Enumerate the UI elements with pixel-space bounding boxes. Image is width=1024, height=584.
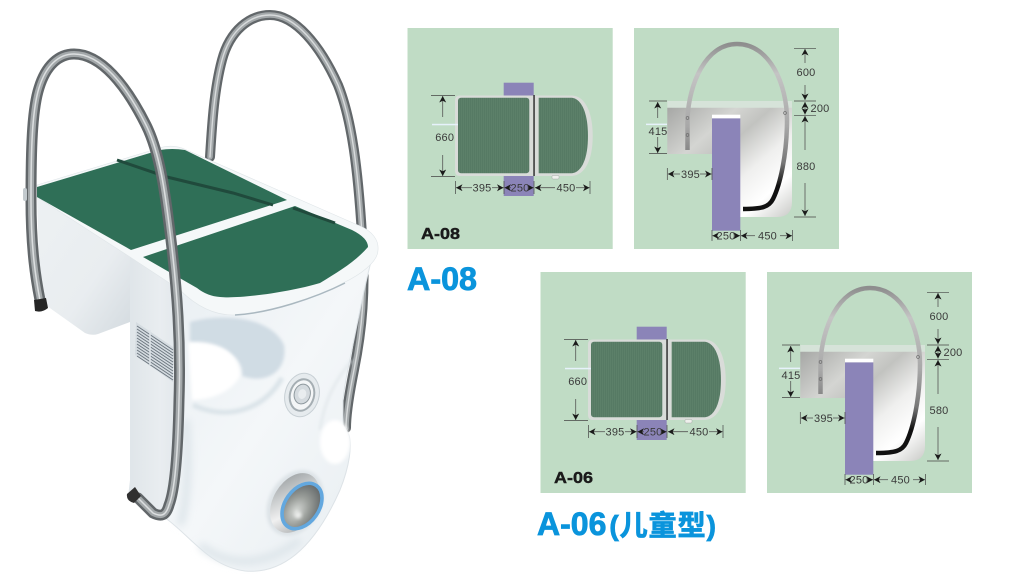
width dimensions bbox=[588, 425, 723, 439]
water level line bbox=[779, 368, 800, 369]
deck band bbox=[667, 101, 792, 108]
grille vents bbox=[135, 322, 173, 382]
width dimensions: 450 bbox=[557, 183, 575, 195]
dimension 660 bbox=[431, 96, 455, 176]
panel: A-08 top view bbox=[408, 28, 613, 249]
body silhouette bbox=[800, 352, 925, 461]
height dimensions bbox=[794, 48, 829, 217]
heading: A-08: A-08 bbox=[407, 261, 477, 297]
width dimensions: 395 bbox=[681, 169, 700, 181]
body silhouette bbox=[667, 108, 792, 217]
white ladder cap bbox=[712, 115, 740, 118]
purple ladder strip top bbox=[504, 83, 534, 96]
dimension 415 bbox=[649, 101, 667, 154]
width dimensions bbox=[456, 181, 590, 195]
width dimensions: 450 bbox=[891, 475, 910, 487]
dimension 415: 415 bbox=[782, 370, 800, 382]
deck tread right bbox=[672, 342, 721, 417]
purple ladder strip top bbox=[637, 327, 667, 340]
panel: A-06 top view bbox=[540, 272, 746, 493]
front shell bbox=[164, 258, 372, 571]
shell lower shading bbox=[180, 420, 300, 561]
heading: A-06 children's model: A-06(儿童型) bbox=[537, 506, 717, 542]
width dimensions: 395 bbox=[606, 427, 624, 439]
dimension 415 bbox=[782, 345, 800, 398]
handrail bbox=[686, 44, 787, 209]
model label: A-06 bbox=[554, 470, 593, 487]
purple ladder strip bottom bbox=[637, 420, 667, 440]
deck tread rear bbox=[37, 149, 287, 250]
underwater light bbox=[255, 460, 335, 546]
height dimensions: 200 bbox=[944, 347, 962, 359]
width dimensions: 450 bbox=[690, 427, 708, 439]
width dimensions: 395 bbox=[814, 413, 833, 425]
height dimensions: 880 bbox=[797, 161, 815, 173]
wall nozzle bbox=[280, 369, 324, 421]
height dimensions: 600 bbox=[930, 311, 948, 323]
latch bbox=[552, 176, 559, 179]
rim shadow line bbox=[235, 283, 345, 315]
deck tread front bbox=[143, 206, 368, 297]
deck tread left bbox=[458, 98, 529, 173]
deck divider bbox=[533, 95, 535, 176]
deck tread left bbox=[591, 342, 662, 417]
pump column bbox=[128, 257, 182, 518]
width dimensions: 395 bbox=[473, 183, 491, 195]
latch bbox=[685, 420, 692, 423]
water level line bbox=[432, 124, 458, 125]
width dimensions: 450 bbox=[758, 231, 777, 243]
dimension 660 bbox=[564, 340, 588, 420]
width dimensions: 250 bbox=[511, 183, 529, 195]
water level line bbox=[646, 124, 667, 125]
handrail bbox=[819, 288, 920, 453]
deck rim bbox=[37, 146, 378, 315]
height dimensions: 600 bbox=[797, 67, 815, 79]
back handrail bbox=[210, 15, 364, 428]
left tank underside bbox=[37, 197, 132, 335]
purple ladder bbox=[845, 362, 873, 475]
shell recess bbox=[188, 317, 285, 412]
panel: A-08 side view bbox=[634, 28, 839, 249]
dimension 660: 660 bbox=[435, 132, 454, 144]
height dimensions bbox=[927, 292, 962, 461]
purple ladder bbox=[712, 118, 740, 231]
deck shadow band bbox=[117, 160, 335, 223]
panel: A-06 side view bbox=[767, 272, 972, 493]
rear rubber foot bbox=[34, 298, 48, 312]
dimension 660: 660 bbox=[568, 376, 587, 388]
white ladder cap bbox=[845, 359, 873, 362]
front rubber foot bbox=[127, 487, 141, 503]
width dimensions bbox=[667, 168, 792, 243]
model label: A-08 bbox=[421, 226, 460, 243]
front handrail bbox=[31, 54, 180, 515]
height dimensions: 200 bbox=[811, 103, 829, 115]
rail bracket bbox=[23, 188, 27, 201]
water level line bbox=[565, 368, 591, 369]
shell crease bbox=[320, 360, 352, 464]
width dimensions: 250 bbox=[644, 427, 662, 439]
deck tread right bbox=[539, 98, 588, 173]
purple ladder strip bottom bbox=[504, 176, 534, 196]
deck band bbox=[800, 345, 925, 352]
width dimensions: 250 bbox=[717, 231, 735, 243]
height dimensions: 580 bbox=[930, 405, 948, 417]
width dimensions bbox=[800, 412, 926, 487]
deck outline bbox=[455, 96, 593, 176]
deck outline bbox=[588, 340, 726, 420]
width dimensions: 250 bbox=[850, 475, 868, 487]
product photo: pool filter unit bbox=[23, 15, 378, 571]
dimension 415: 415 bbox=[649, 126, 667, 138]
deck divider bbox=[666, 339, 668, 420]
